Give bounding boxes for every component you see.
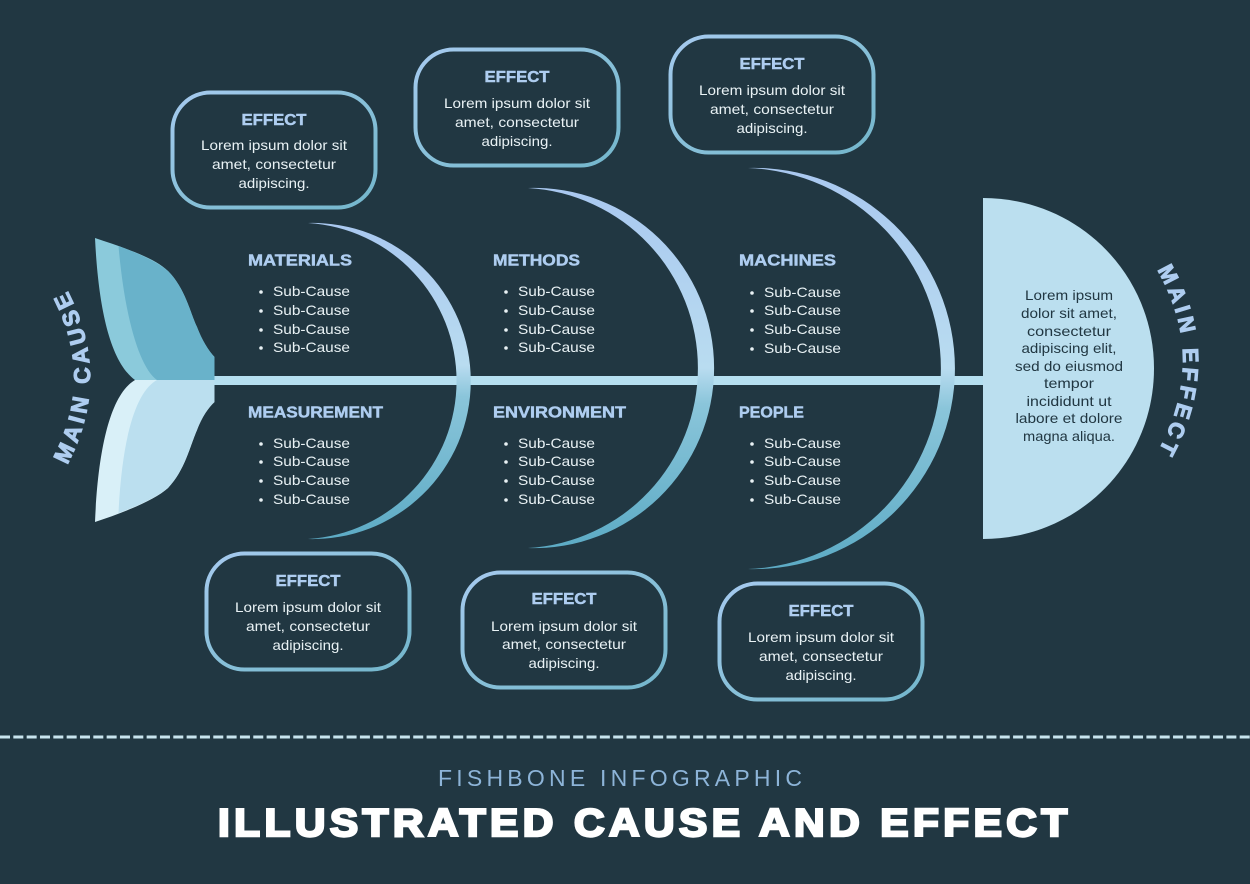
- title: ILLUSTRATED CAUSE AND EFFECT: [218, 801, 1067, 845]
- effect box 3: [670, 36, 874, 152]
- cause group: materials: MATERIALS: [248, 252, 352, 270]
- cause group: machines: MACHINES: [739, 252, 836, 270]
- effect box 3: amet, consectetur: [710, 101, 834, 117]
- cause group: machines: Sub-Cause: [764, 321, 841, 337]
- cause group: environment: Sub-Cause: [518, 472, 595, 488]
- cause group: materials: Sub-Cause: [273, 321, 350, 337]
- effect box 4: amet, consectetur: [246, 618, 370, 634]
- effect box 2: [416, 50, 618, 166]
- effect box 4: adipiscing.: [272, 637, 344, 653]
- effect box 6: Lorem ipsum dolor sit: [748, 629, 894, 645]
- effect box 2: EFFECT: [484, 69, 550, 86]
- cause group: materials: Sub-Cause: [273, 339, 350, 355]
- fish head: main effect: consectetur: [1027, 323, 1111, 339]
- fish spine: [210, 376, 985, 385]
- effect box 4: EFFECT: [276, 573, 341, 590]
- rib arc 3: [748, 168, 955, 569]
- effect box 3: Lorem ipsum dolor sit: [699, 82, 845, 98]
- fish head: main effect: magna aliqua.: [1023, 428, 1115, 444]
- effect box 5: [462, 572, 666, 688]
- cause group: measurement: [248, 404, 384, 507]
- cause group: machines: Sub-Cause: [764, 302, 841, 318]
- fish head: main effect: labore et dolore: [1016, 410, 1123, 426]
- cause group: methods: Sub-Cause: [518, 283, 595, 299]
- cause group: machines: [739, 252, 841, 356]
- cause group: materials: Sub-Cause: [273, 302, 350, 318]
- effect box 5: Lorem ipsum dolor sit: [491, 618, 637, 634]
- cause group: methods: Sub-Cause: [518, 302, 595, 318]
- cause group: environment: Sub-Cause: [518, 491, 595, 507]
- cause group: methods: METHODS: [493, 252, 580, 270]
- cause group: methods: [493, 252, 595, 355]
- cause group: environment: Sub-Cause: [518, 453, 595, 469]
- effect box 6: EFFECT: [788, 603, 854, 620]
- cause group: machines: Sub-Cause: [764, 284, 841, 300]
- cause group: measurement: Sub-Cause: [273, 491, 350, 507]
- cause group: materials: [248, 252, 352, 355]
- effect box 3: EFFECT: [740, 56, 805, 73]
- fish head: main effect: Lorem ipsum: [1025, 287, 1113, 303]
- cause group: environment: Sub-Cause: [518, 435, 595, 451]
- rib arc 1: [308, 223, 471, 539]
- effect box 2: adipiscing.: [482, 133, 552, 149]
- cause group: measurement: Sub-Cause: [273, 472, 350, 488]
- effect box 1: EFFECT: [242, 112, 307, 129]
- label: main effect: MAIN EFFECT: [1157, 263, 1199, 458]
- fish tail: [95, 238, 214, 522]
- cause group: people: Sub-Cause: [764, 453, 841, 469]
- effect box 1: Lorem ipsum dolor sit: [201, 137, 347, 153]
- cause group: measurement: MEASUREMENT: [248, 404, 384, 422]
- cause group: people: [739, 404, 841, 507]
- effect box 5: EFFECT: [532, 591, 597, 608]
- effect box 6: adipiscing.: [786, 667, 856, 683]
- effect box 4: Lorem ipsum dolor sit: [235, 599, 381, 615]
- effect box 6: [720, 584, 922, 700]
- effect box 1: [172, 92, 376, 208]
- effect box 5: amet, consectetur: [502, 636, 626, 652]
- subtitle: FISHBONE INFOGRAPHIC: [438, 765, 802, 791]
- effect box 5: adipiscing.: [528, 655, 600, 671]
- fish head: main effect: dolor sit amet,: [1021, 305, 1117, 321]
- fish head: main effect: incididunt ut: [1026, 393, 1112, 409]
- cause group: people: Sub-Cause: [764, 472, 841, 488]
- effect box 1: adipiscing.: [238, 175, 310, 191]
- cause group: measurement: Sub-Cause: [273, 435, 350, 451]
- cause group: people: Sub-Cause: [764, 435, 841, 451]
- fish head: main effect: [983, 198, 1154, 539]
- fish head: main effect: sed do eiusmod: [1015, 358, 1123, 374]
- effect box 4: [206, 554, 410, 670]
- cause group: people: PEOPLE: [739, 404, 804, 422]
- effect box 1: amet, consectetur: [212, 156, 336, 172]
- cause group: methods: Sub-Cause: [518, 339, 595, 355]
- effect box 2: amet, consectetur: [455, 114, 579, 130]
- cause group: machines: Sub-Cause: [764, 340, 841, 356]
- effect box 3: adipiscing.: [736, 120, 808, 136]
- fish head: main effect: tempor: [1044, 375, 1094, 391]
- cause group: measurement: Sub-Cause: [273, 453, 350, 469]
- label: main cause: MAIN CAUSE: [53, 291, 91, 464]
- effect box 6: amet, consectetur: [759, 648, 883, 664]
- rib arc 2: [528, 188, 714, 548]
- fish head: main effect: adipiscing elit,: [1022, 340, 1116, 356]
- cause group: environment: [493, 404, 627, 507]
- cause group: environment: ENVIRONMENT: [493, 404, 627, 422]
- cause group: people: Sub-Cause: [764, 491, 841, 507]
- cause group: materials: Sub-Cause: [273, 283, 350, 299]
- cause group: methods: Sub-Cause: [518, 321, 595, 337]
- effect box 2: Lorem ipsum dolor sit: [444, 95, 590, 111]
